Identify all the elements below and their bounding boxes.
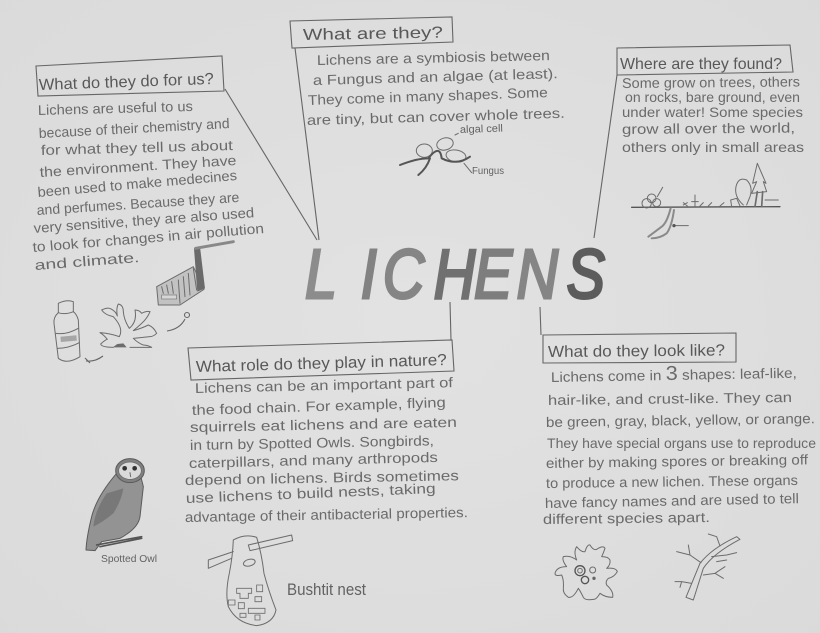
heading box: look like: What do they look like?: [548, 342, 725, 361]
arrow: machine to lichen: [167, 312, 190, 331]
icon: bushtit nest: [208, 535, 293, 626]
arrow: lichen to bottle: [85, 356, 103, 363]
text block: look like: to produce a new lichen. These organs: [546, 472, 798, 491]
heading box: role: What role do they play in nature?: [196, 352, 447, 376]
heading box: what do they do for us: [36, 56, 224, 96]
text block: what do they do for us: Lichens are useful to us: [38, 98, 193, 118]
text block: look like: Lichens come in 3 shapes: leaf-like,: [551, 361, 797, 387]
heading box: look like: [543, 333, 736, 363]
panel: what are they: [290, 17, 565, 240]
text block: what do they do for us: [32, 98, 264, 273]
text block: where are they found: on rocks, bare ground, even: [625, 89, 800, 105]
panel: what role do they play in nature: [86, 302, 468, 626]
text block: what are they: Lichens are a symbiosis between: [317, 47, 550, 68]
text block: where are they found: [622, 73, 804, 155]
text block: look like: hair-like, and crust-like. They can: [548, 389, 792, 408]
label: spotted owl: Spotted Owl: [101, 553, 157, 565]
text block: what are they: are tiny, but can cover whole trees.: [307, 105, 565, 128]
text block: where are they found: grow all over the world,: [622, 119, 795, 137]
text block: role: [185, 374, 468, 525]
text block: what do they do for us: the environment. They have: [39, 152, 237, 180]
text block: role: advantage of their antibacterial properties.: [185, 504, 468, 525]
heading box: role: [188, 340, 454, 380]
icon: landscape with rocks, trees and hanging lichen: [632, 163, 780, 238]
icon: spotted owl: [86, 459, 144, 551]
text block: what do they do for us: and climate.: [34, 249, 140, 273]
text block: where are they found: Some grow on trees, others: [622, 73, 800, 91]
connector line: what do they do for us: [225, 89, 317, 240]
text block: what do they do for us: been used to make medecines: [37, 167, 238, 200]
text block: what are they: They come in many shapes. Some: [308, 84, 548, 108]
text block: role: use lichens to build nests, taking: [185, 480, 436, 506]
heading box: where are they found: Where are they found?: [620, 56, 782, 73]
text block: what do they do for us: and perfumes. Because they are: [36, 189, 240, 218]
icon: lichen plant: [100, 304, 157, 347]
text block: where are they found: others only in small areas: [622, 139, 804, 155]
text block: look like: have fancy names and are used to tell: [545, 490, 799, 511]
text block: role: in turn by Spotted Owls. Songbirds,: [190, 432, 434, 453]
text block: look like: They have special organs use to reproduce: [547, 435, 816, 451]
title: LICHENS: L ICHENS: [305, 235, 605, 313]
text block: look like: either by making spores or breaking off: [546, 451, 808, 471]
text block: role: caterpillars, and many arthropods: [189, 449, 438, 471]
text block: what are they: a Fungus and an algae (at least).: [313, 65, 558, 88]
text block: what do they do for us: very sensitive, they are also used: [33, 204, 255, 236]
text block: role: the food chain. For example, flying: [192, 394, 446, 418]
connector line: what are they: [295, 48, 319, 240]
text block: look like: [543, 361, 816, 527]
text block: role: Lichens can be an important part of: [195, 374, 453, 396]
panel: what do they do for us: [32, 56, 317, 363]
text block: role: squirrels eat lichens and are eaten: [190, 414, 457, 435]
connector line: role: [450, 302, 451, 340]
text block: look like: different species apart.: [543, 509, 710, 527]
heading box: what are they: What are they?: [303, 25, 443, 44]
heading box: what are they: [290, 17, 453, 48]
text block: what do they do for us: for what they tell us about: [41, 137, 233, 158]
text block: where are they found: under water! Some species: [622, 104, 803, 120]
icon: grinder machine: [157, 242, 233, 305]
label: bushtit nest: Bushtit nest: [287, 580, 366, 599]
connector line: where are they found: [594, 75, 617, 238]
text block: what do they do for us: because of their chemistry and: [38, 115, 230, 141]
text block: what are they: [307, 47, 565, 128]
icon: fungus and algal cell diagram: [400, 133, 472, 175]
icon: medicine bottle: [54, 301, 80, 361]
icon: leaf-like lichen with discs: [555, 545, 617, 600]
heading box: what do they do for us: What do they do for us?: [39, 71, 214, 94]
connector line: look like: [540, 307, 541, 335]
panel: what do they look like: [540, 307, 816, 600]
text block: role: depend on lichens. Birds sometimes: [185, 467, 459, 488]
label: algal cell: algal cell: [460, 123, 503, 136]
label: fungus: Fungus: [472, 165, 504, 177]
icon: hair-like lichen on twig: [675, 534, 740, 600]
heading box: where are they found: [617, 45, 793, 75]
panel: where are they found: [594, 45, 804, 238]
text block: look like: be green, gray, black, yellow, or orange.: [546, 410, 815, 430]
text block: what do they do for us: to look for changes in air pollution: [32, 220, 264, 255]
